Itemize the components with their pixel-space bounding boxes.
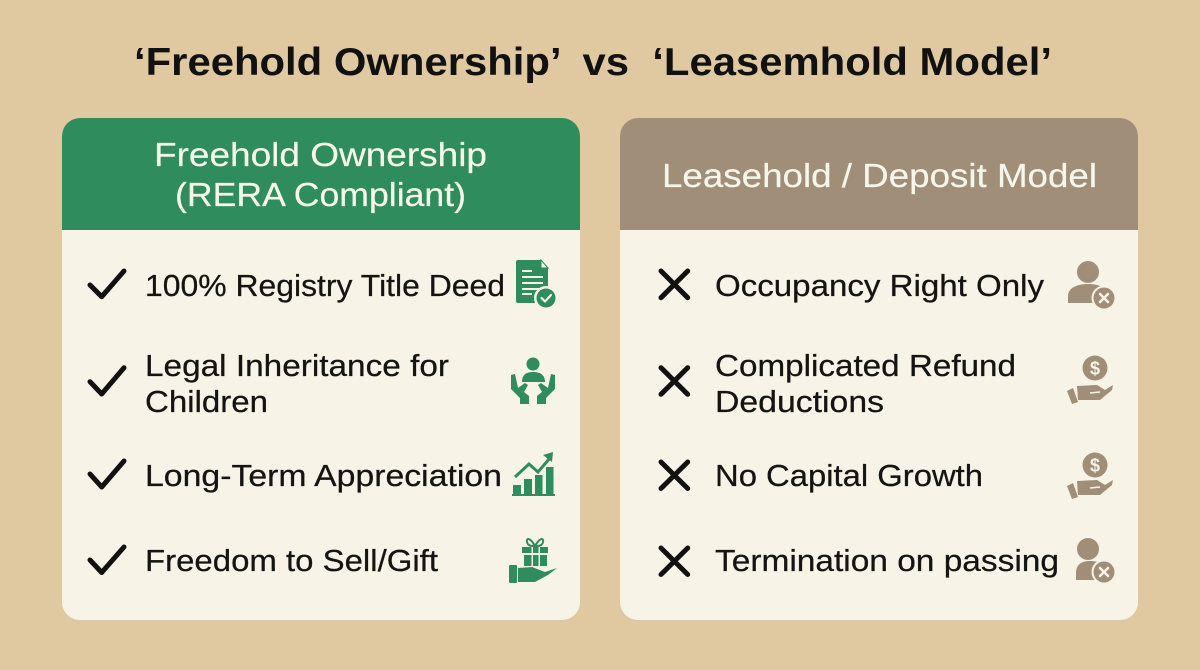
icon: gift on hand bbox=[509, 539, 557, 583]
icon: person with cross bbox=[1076, 538, 1116, 584]
heading: freehold ownership: (RERA Compliant) bbox=[175, 176, 466, 213]
row: refund: Deductions bbox=[715, 385, 884, 419]
row: title deed bbox=[90, 260, 558, 310]
panel header: leasehold bbox=[620, 118, 1138, 230]
title: ‘Freehold Ownership’ vs ‘Leasemhold Model’ bbox=[134, 41, 1052, 84]
row: title deed: 100% Registry Title Deed bbox=[145, 269, 505, 303]
icon: hand with coin bbox=[1067, 356, 1113, 404]
row: appreciation: Long-Term Appreciation bbox=[145, 459, 502, 493]
heading: freehold ownership bbox=[154, 136, 487, 213]
row: sell or gift bbox=[90, 539, 557, 583]
icon: document with check bbox=[516, 260, 558, 310]
row: inheritance: Children bbox=[145, 385, 268, 419]
row: capital growth bbox=[661, 452, 1113, 499]
row: occupancy bbox=[661, 261, 1116, 310]
row: sell or gift: Freedom to Sell/Gift bbox=[145, 544, 439, 578]
icon: hand with coin bbox=[1067, 452, 1113, 499]
icon: growth chart bbox=[512, 452, 555, 496]
row: inheritance bbox=[90, 349, 555, 419]
icon: hands holding person bbox=[511, 358, 555, 404]
icon: hand with coin: $ bbox=[1090, 456, 1100, 476]
row: appreciation bbox=[90, 452, 555, 496]
row: refund bbox=[661, 349, 1113, 419]
icon: person with cross bbox=[1068, 261, 1116, 310]
row: inheritance: Legal Inheritance for bbox=[145, 349, 449, 383]
row: occupancy: Occupancy Right Only bbox=[715, 269, 1045, 303]
panel: freehold ownership bbox=[62, 118, 580, 620]
row: termination bbox=[661, 538, 1116, 584]
heading: freehold ownership: Freehold Ownership bbox=[154, 136, 487, 173]
row: capital growth: No Capital Growth bbox=[715, 459, 983, 493]
row: refund: Complicated Refund bbox=[715, 349, 1016, 383]
panel: leasehold deposit model bbox=[620, 118, 1138, 620]
panel header: freehold bbox=[62, 118, 580, 230]
icon: hand with coin: $ bbox=[1090, 358, 1100, 378]
heading: leasehold deposit model: Leasehold / Deposit Model bbox=[662, 157, 1097, 194]
row: termination: Termination on passing bbox=[715, 544, 1059, 578]
